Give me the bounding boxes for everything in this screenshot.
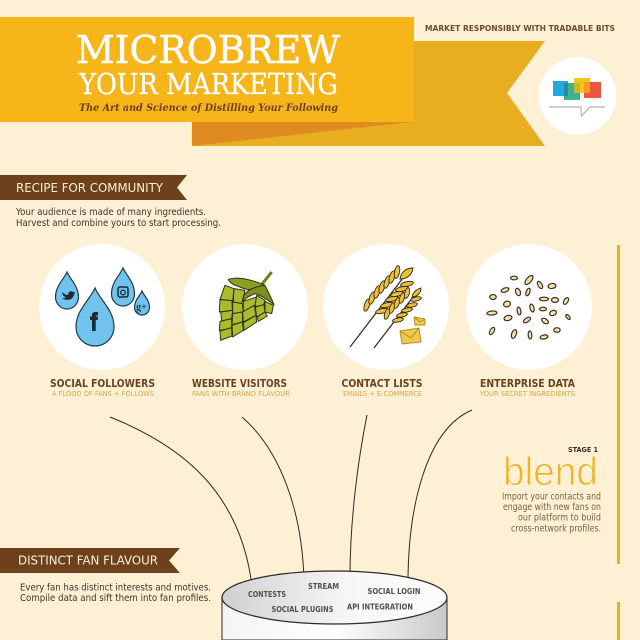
cylinder labels: SOCIAL PLUGINS [272, 605, 334, 614]
title: MICROBREW [76, 28, 340, 72]
label: SOCIAL FOLLOWERS [50, 378, 155, 390]
stage description [502, 492, 601, 534]
ribbon fold [192, 122, 412, 146]
sublabel: A FLOOD OF FANS + FOLLOWS [52, 390, 155, 398]
section heading: recipe for community [0, 175, 187, 200]
stage description: Import your contacts and [502, 492, 601, 502]
fan flavour text [20, 582, 211, 604]
stage rule lines [617, 245, 620, 640]
intro text [15, 207, 221, 229]
panel: social followers: g+ [136, 302, 147, 313]
label: CONTACT LISTS [342, 378, 422, 390]
cylinder labels: API INTEGRATION [347, 602, 413, 612]
panel: website visitors [182, 244, 308, 398]
icon: hop cone [219, 272, 274, 340]
panel: contact lists [323, 244, 449, 398]
stage description: engage with new fans on [503, 502, 601, 513]
icon: water drops [56, 268, 150, 346]
cylinder labels: SOCIAL LOGIN [368, 587, 420, 596]
label: WEBSITE VISITORS [192, 378, 287, 390]
section heading: recipe for community: RECIPE FOR COMMUNITY [16, 181, 164, 195]
section heading: distinct fan flavour: DISTINCT FAN FLAVOUR [18, 554, 158, 568]
sublabel: EMAILS + E-COMMERCE [343, 390, 422, 398]
cylinder labels: CONTESTS [248, 590, 286, 599]
front banner [0, 17, 414, 122]
label: ENTERPRISE DATA [480, 378, 576, 390]
section heading: distinct fan flavour [0, 548, 180, 573]
subtitle: The Art and Science of Distilling Your Following [79, 102, 338, 114]
funnel lines [110, 410, 472, 586]
panel: social followers [39, 244, 165, 398]
intro text: Harvest and combine yours to start processing. [16, 218, 221, 229]
title: YOUR MARKETING [78, 67, 338, 101]
stage description: cross-network profiles. [511, 524, 601, 534]
panel: enterprise data [466, 244, 592, 398]
header banner [0, 17, 545, 146]
back ribbon [192, 41, 545, 146]
sublabel: YOUR SECRET INGREDIENTS [479, 390, 576, 398]
fan flavour text: Every fan has distinct interests and motives. [20, 582, 211, 594]
stage description: our platform to build [518, 512, 601, 524]
logo badge [538, 57, 616, 135]
tagline: MARKET RESPONSIBLY WITH TRADABLE BITS [425, 24, 615, 33]
stage 1 text [502, 446, 601, 534]
stage label: STAGE 1 [568, 446, 598, 454]
icon: wheat and envelopes [350, 265, 425, 348]
cylinder labels: STREAM [308, 582, 339, 591]
cylinder labels [248, 582, 420, 614]
fan flavour text: Compile data and sift them into fan profiles. [20, 593, 211, 604]
icon: grains [487, 274, 571, 340]
stage title: blend [503, 450, 598, 494]
sublabel: FANS WITH BRAND FLAVOUR [192, 390, 290, 398]
intro text: Your audience is made of many ingredients. [15, 207, 206, 218]
title [76, 28, 340, 101]
